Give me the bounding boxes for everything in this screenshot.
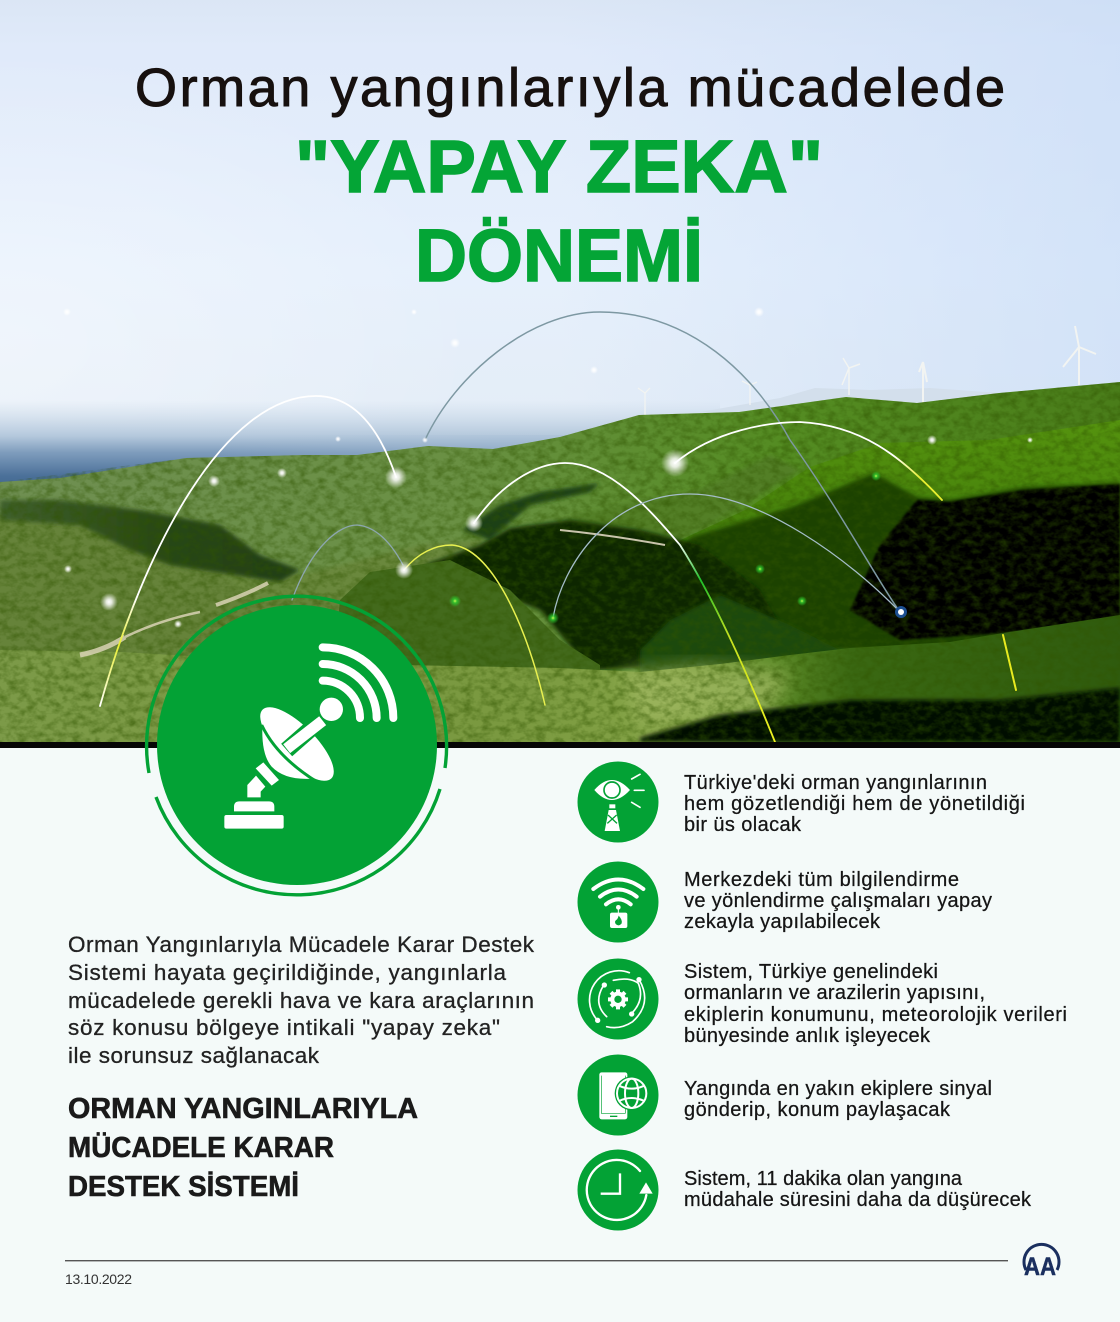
dirt roads [80, 583, 268, 655]
glowing stars [63, 307, 1033, 628]
dark lower edge [640, 688, 1120, 742]
feature text 2: ve yönlendirme çalışmaları yapay [684, 890, 992, 912]
feature text 3: bünyesinde anlık işleyecek [684, 1025, 931, 1047]
feature text 2: Merkezdeki tüm bilgilendirme [684, 869, 959, 891]
wind turbines [638, 326, 1096, 415]
hero photo: forested hills under a pale sky [0, 0, 1120, 742]
central dark hill [425, 520, 800, 670]
system name heading: MÜCADELE KARAR [68, 1131, 334, 1164]
ring arcs [147, 596, 447, 895]
land [0, 382, 1120, 742]
feature text 3 [684, 961, 1067, 1047]
black divider band [0, 742, 1120, 748]
arc 6 [553, 494, 900, 618]
footer [65, 1244, 1059, 1287]
arc 5 [404, 545, 545, 705]
arc 4 [474, 463, 775, 742]
feature text 1: hem gözetlendiği hem de yönetildiği [684, 793, 1025, 815]
right lower hill [638, 595, 838, 672]
left dark ridge [0, 500, 300, 582]
yellow trail [1003, 635, 1016, 690]
satellite dish icon [224, 647, 393, 829]
arc 2 [425, 312, 900, 612]
date: 13.10.2022 [65, 1271, 132, 1287]
black shadow on the right [850, 484, 1120, 640]
system name heading: ORMAN YANGINLARIYLA [68, 1093, 418, 1125]
feature text 5: müdahale süresini daha da düşürecek [684, 1189, 1032, 1211]
foreground shrubs [0, 615, 1120, 742]
feature text 4: Yangında en yakın ekiplere sinyal [684, 1078, 992, 1100]
feature text 3: Sistem, Türkiye genelindeki [684, 961, 938, 983]
left valley olive slope [0, 516, 340, 656]
description paragraph: Sistemi hayata geçirildiğinde, yangınlarla [68, 960, 506, 985]
system name heading: DESTEK SİSTEMİ [68, 1171, 299, 1203]
title line 2: "YAPAY ZEKA" [295, 125, 823, 208]
network arcs with glowing nodes [100, 312, 1016, 742]
feature text 4: gönderip, konum paylaşacak [684, 1099, 951, 1121]
feature text 1: Türkiye'deki orman yangınlarının [684, 772, 987, 794]
feature text 3: ormanların ve arazilerin yapısını, [684, 982, 985, 1004]
feature text 2: zekayla yapılabilecek [684, 911, 881, 933]
description paragraph: Orman Yangınlarıyla Mücadele Karar Destek [68, 932, 535, 957]
title line 1: Orman yangınlarıyla mücadelede [135, 58, 1005, 118]
icon: satellite dish medallion [147, 596, 447, 895]
bright sunlit slope [680, 420, 1120, 542]
title line 3: DÖNEMİ [415, 214, 703, 297]
feature text 1: bir üs olacak [684, 814, 802, 836]
icon: phone and globe [578, 1054, 658, 1136]
description paragraph [68, 932, 535, 1068]
description paragraph: ile sorunsuz sağlanacak [68, 1043, 320, 1068]
arc 1 [100, 396, 396, 706]
title [135, 58, 1005, 297]
feature text 5: Sistem, 11 dakika olan yangına [684, 1168, 963, 1190]
road across dark hill [560, 530, 665, 545]
feature text 1 [684, 772, 1025, 836]
feature text 2 [684, 869, 992, 933]
description paragraph: söz konusu bölgeye intikali "yapay zeka" [68, 1015, 500, 1040]
logo: AA: AA [1024, 1253, 1056, 1281]
sea [0, 407, 708, 482]
sky [0, 0, 1120, 420]
icon: wifi fire sensor [578, 862, 658, 942]
icon: clock with arrow [578, 1150, 658, 1230]
feature text 3: ekiplerin konumunu, meteorolojik verileri [684, 1004, 1067, 1026]
system name heading [68, 1093, 418, 1203]
foliage texture [0, 382, 1120, 742]
arc 7 [292, 525, 403, 600]
description paragraph: mücadelede gerekli hava ve kara araçlarının [68, 988, 534, 1013]
feature text 4 [684, 1078, 992, 1121]
central green hill [339, 560, 600, 670]
icon: watchtower eye [578, 762, 658, 842]
panel: main description [68, 932, 535, 1203]
feature text 5 [684, 1168, 1032, 1211]
icon: gear orbit [578, 958, 658, 1040]
shadowed mid slope [640, 473, 1120, 650]
arc 3 [675, 422, 942, 500]
panel: feature list [578, 762, 1067, 1230]
distant mountains [720, 388, 996, 412]
